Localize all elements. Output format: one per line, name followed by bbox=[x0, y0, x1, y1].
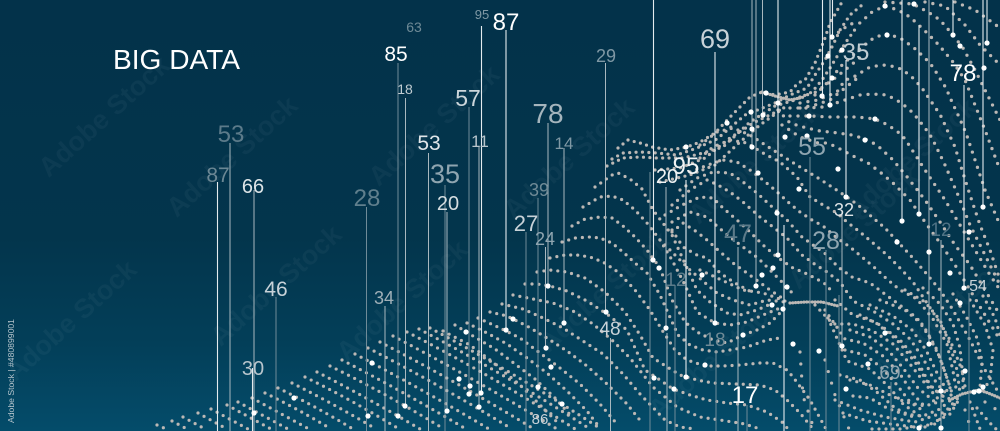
bright lines bbox=[218, 0, 987, 431]
watermark pattern: Adobe Stock bbox=[0, 253, 143, 387]
dim lines bbox=[276, 63, 969, 431]
numeric labels: 48 bbox=[599, 319, 621, 340]
numeric labels: 27 bbox=[514, 211, 538, 236]
watermark pattern: Adobe Stock bbox=[33, 49, 176, 183]
numeric labels: 18 bbox=[397, 81, 413, 97]
numeric labels: 54 bbox=[969, 278, 987, 295]
numeric labels: 69 bbox=[879, 363, 901, 384]
numeric labels: 30 bbox=[242, 358, 264, 380]
numeric labels: 78 bbox=[950, 60, 976, 87]
stock id caption: Adobe Stock | #480899001 bbox=[6, 319, 16, 423]
numeric labels: 12 bbox=[930, 220, 952, 241]
numeric labels: 57 bbox=[455, 85, 481, 111]
watermark pattern: Adobe Stock bbox=[331, 233, 474, 367]
numeric labels: 20 bbox=[437, 193, 459, 215]
watermark pattern: Adobe Stock bbox=[683, 96, 826, 230]
numeric labels: 53 bbox=[218, 121, 244, 148]
watermark pattern: Adobe Stock bbox=[363, 58, 506, 192]
numeric labels: 18 bbox=[704, 330, 726, 351]
numeric labels: 32 bbox=[834, 200, 854, 220]
watermark pattern: Adobe Stock bbox=[643, 291, 786, 425]
numeric labels: 87 bbox=[493, 9, 519, 36]
watermark pattern: Adobe Stock bbox=[205, 218, 348, 352]
numeric labels: 35 bbox=[843, 39, 869, 66]
ridge fan on the right bbox=[778, 2, 1000, 340]
numeric labels: 85 bbox=[384, 43, 408, 66]
numeric labels: 28 bbox=[812, 227, 840, 255]
numeric labels: 39 bbox=[529, 180, 549, 200]
watermark pattern: Adobe Stock bbox=[840, 91, 983, 225]
lobes flowing into the central valley bbox=[502, 173, 826, 429]
numeric labels: 46 bbox=[264, 278, 288, 301]
numeric labels: 53 bbox=[417, 132, 441, 155]
numeric labels: 78 bbox=[532, 98, 564, 129]
fan around the right pinch bbox=[815, 288, 1000, 429]
numeric labels: 55 bbox=[798, 133, 826, 161]
numeric labels: 47 bbox=[724, 220, 752, 248]
thick ridge segments at pinches bbox=[762, 92, 1000, 400]
title: BIG DATA bbox=[113, 44, 240, 75]
numeric labels bbox=[206, 7, 987, 428]
medium lines bbox=[230, 0, 941, 431]
numeric labels: 14 bbox=[555, 134, 573, 153]
numeric labels: 95 bbox=[475, 7, 489, 22]
numeric labels: 63 bbox=[406, 19, 422, 35]
numeric labels: 69 bbox=[700, 24, 730, 54]
vertical data lines bbox=[218, 0, 987, 431]
strands descending through the middle to the right pinch bbox=[665, 128, 1000, 396]
numeric labels: 17 bbox=[732, 382, 758, 409]
numeric labels: 87 bbox=[206, 164, 230, 187]
numeric labels: 95 bbox=[673, 153, 699, 180]
watermark pattern: Adobe Stock bbox=[533, 224, 676, 358]
numeric labels: 11 bbox=[471, 132, 489, 151]
watermark pattern: Adobe Stock bbox=[161, 89, 304, 223]
numeric labels: 20 bbox=[656, 166, 678, 188]
numeric labels: 12 bbox=[665, 270, 687, 291]
highlighted white nodes bbox=[251, 1, 990, 431]
numeric labels: 86 bbox=[532, 411, 548, 428]
numeric labels: 66 bbox=[242, 176, 264, 198]
watermark pattern: Adobe Stock bbox=[498, 91, 641, 225]
numeric labels: 35 bbox=[430, 159, 460, 189]
numeric labels: 29 bbox=[596, 46, 616, 66]
upper ridge and the strands running into the first pinch bbox=[607, 2, 862, 182]
numeric labels: 28 bbox=[354, 185, 380, 212]
watermark pattern: Adobe Stock bbox=[783, 161, 926, 295]
numeric labels: 34 bbox=[374, 288, 394, 308]
numeric labels: 24 bbox=[535, 229, 555, 249]
left band of dotted strands bbox=[157, 312, 643, 429]
